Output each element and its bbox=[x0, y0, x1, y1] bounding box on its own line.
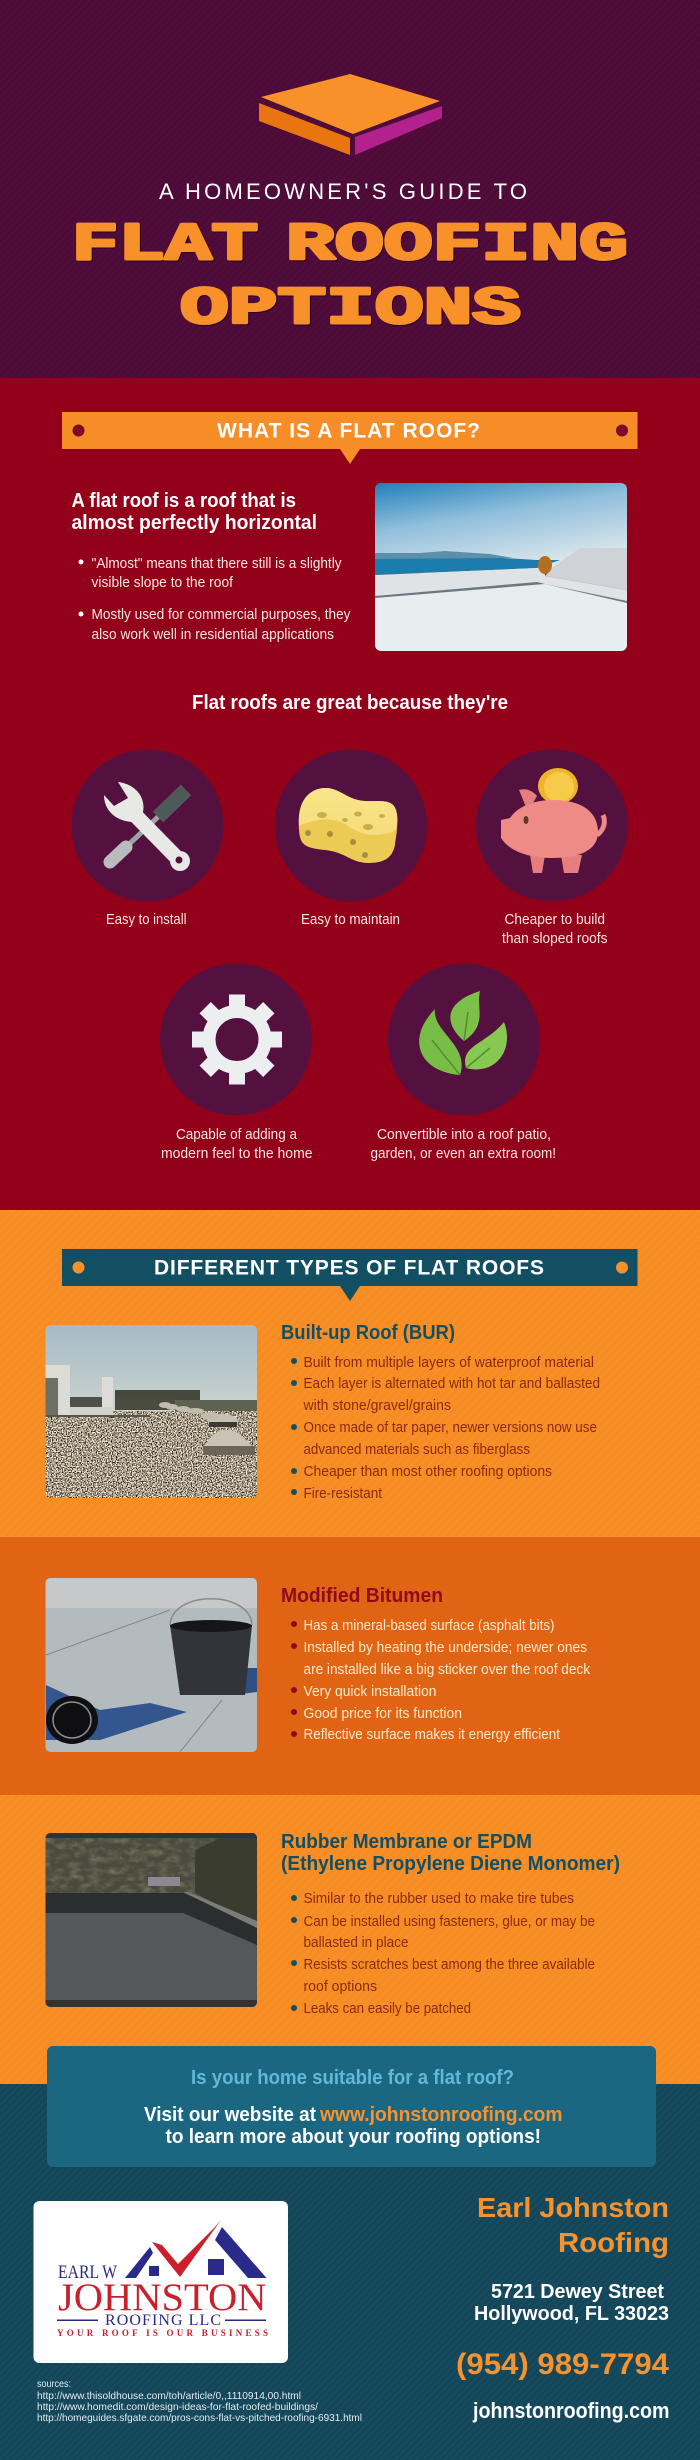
callout: visit website: to learn more about your roofing options! bbox=[166, 2126, 541, 2148]
icon: flat roof slab bbox=[259, 74, 442, 155]
logo: Earl W Johnston Roofing LLC: ROOFING LLC bbox=[105, 2312, 221, 2329]
list: modified bitumen facts: Reflective surface makes it energy efficient bbox=[304, 1727, 560, 1743]
definition text: A flat roof is a roof that is bbox=[72, 490, 296, 512]
benefit: cheaper to build: Cheaper to build bbox=[504, 912, 605, 928]
definition text: also work well in residential applications bbox=[92, 627, 334, 643]
heading: modified bitumen: Modified Bitumen bbox=[281, 1585, 443, 1607]
title: A HOMEOWNER'S GUIDE TO bbox=[159, 179, 527, 204]
title: ROOFING bbox=[286, 215, 628, 275]
list: built-up roof facts: Fire-resistant bbox=[304, 1486, 382, 1502]
logo: Earl W Johnston Roofing LLC: YOUR ROOF IS OUR BUSINESS bbox=[57, 2328, 268, 2338]
logo: Earl W Johnston Roofing LLC bbox=[34, 2201, 288, 2363]
contact details: Roofing bbox=[558, 2227, 669, 2258]
definition text: almost perfectly horizontal bbox=[72, 512, 317, 534]
banner: what is a flat roof bbox=[62, 412, 638, 464]
panel: rubber membrane bbox=[0, 1795, 700, 2084]
callout: visit website: www.johnstonroofing.com bbox=[319, 2104, 562, 2126]
list: rubber membrane facts: roof options bbox=[304, 1979, 377, 1995]
definition text: Mostly used for commercial purposes, they bbox=[92, 607, 351, 623]
list: modified bitumen facts: Has a mineral-based surface (asphalt bits) bbox=[304, 1618, 554, 1634]
list: built-up roof facts: with stone/gravel/grains bbox=[303, 1398, 451, 1414]
contact details: Earl Johnston bbox=[477, 2192, 669, 2223]
title bbox=[72, 179, 628, 339]
sources: http://www.thisoldhouse.com/toh/article/0,,1110914,00.html bbox=[37, 2390, 301, 2402]
callout: visit website: Visit our website at bbox=[144, 2104, 316, 2126]
title: OPTIONS bbox=[180, 279, 521, 339]
definition text: "Almost" means that there still is a slightly bbox=[92, 556, 342, 572]
contact details: 5721 Dewey Street bbox=[491, 2281, 664, 2303]
sources: http://homeguides.sfgate.com/pros-cons-flat-vs-pitched-roofing-6931.html bbox=[37, 2412, 362, 2424]
list: built-up roof facts: Built from multiple layers of waterproof material bbox=[304, 1355, 594, 1371]
panel: modified bitumen bbox=[0, 1537, 700, 1795]
photo: white flat roof over the sea bbox=[375, 483, 627, 651]
list: rubber membrane facts: Similar to the rubber used to make tire tubes bbox=[304, 1891, 574, 1907]
benefit: cheaper to build bbox=[476, 750, 628, 947]
benefit: easy to install: Easy to install bbox=[106, 912, 186, 928]
benefit: easy to install bbox=[72, 750, 224, 928]
photo: gravel built-up roof bbox=[45, 1325, 257, 1498]
definition text bbox=[72, 490, 351, 643]
photo: bitumen roll and bucket bbox=[45, 1578, 257, 1752]
callout: visit website: Is your home suitable for a flat roof? bbox=[191, 2067, 514, 2089]
banner: different types of flat roofs: DIFFERENT TYPES OF FLAT ROOFS bbox=[154, 1256, 544, 1280]
banner: what is a flat roof: WHAT IS A FLAT ROOF? bbox=[217, 420, 480, 442]
list: built-up roof facts: advanced materials such as fiberglass bbox=[304, 1442, 530, 1458]
list: modified bitumen facts bbox=[291, 1618, 591, 1743]
contact details: (954) 989-7794 bbox=[456, 2348, 669, 2381]
sources: http://www.homedit.com/design-ideas-for-flat-roofed-buildings/ bbox=[37, 2401, 318, 2413]
benefit: modern feel bbox=[160, 964, 312, 1162]
list: rubber membrane facts bbox=[291, 1891, 595, 2017]
logo: Earl W Johnston Roofing LLC: EARL W bbox=[58, 2262, 117, 2283]
list: rubber membrane facts: ballasted in place bbox=[304, 1935, 408, 1951]
contact details: johnstonroofing.com bbox=[472, 2398, 670, 2423]
benefit: modern feel: modern feel to the home bbox=[161, 1146, 312, 1162]
heading: rubber membrane: Rubber Membrane or EPDM bbox=[281, 1831, 532, 1853]
list: modified bitumen facts: are installed like a big sticker over the roof deck bbox=[304, 1662, 591, 1678]
benefit: convertible roof: garden, or even an extra room! bbox=[370, 1146, 556, 1162]
panel: built-up roof bbox=[0, 1210, 700, 1537]
callout: visit website bbox=[47, 2046, 656, 2167]
title: FLAT bbox=[72, 215, 258, 275]
list: built-up roof facts: Cheaper than most other roofing options bbox=[304, 1464, 552, 1480]
list: rubber membrane facts: Leaks can easily be patched bbox=[304, 2001, 471, 2017]
subheading: flat roofs are great: Flat roofs are great because they're bbox=[192, 692, 508, 714]
list: built-up roof facts bbox=[291, 1355, 600, 1502]
list: rubber membrane facts: Can be installed using fasteners, glue, or may be bbox=[304, 1914, 595, 1930]
benefit: easy to maintain: Easy to maintain bbox=[301, 912, 400, 928]
panel: header bbox=[0, 0, 700, 378]
sources: sources: bbox=[37, 2378, 71, 2390]
benefit: convertible roof bbox=[370, 964, 556, 1162]
heading: rubber membrane bbox=[281, 1831, 620, 1875]
banner: different types of flat roofs bbox=[62, 1249, 638, 1301]
list: modified bitumen facts: Installed by heating the underside; newer ones bbox=[304, 1640, 587, 1656]
list: built-up roof facts: Once made of tar paper, newer versions now use bbox=[304, 1420, 597, 1436]
photo: EPDM rubber roof bbox=[45, 1833, 257, 2007]
list: modified bitumen facts: Very quick installation bbox=[304, 1684, 436, 1700]
sources bbox=[37, 2378, 362, 2424]
heading: rubber membrane: (Ethylene Propylene Diene Monomer) bbox=[281, 1853, 620, 1875]
heading: built-up roof: Built-up Roof (BUR) bbox=[281, 1322, 455, 1344]
panel: footer bbox=[0, 2046, 700, 2460]
list: modified bitumen facts: Good price for its function bbox=[304, 1706, 462, 1722]
list: built-up roof facts: Each layer is alternated with hot tar and ballasted bbox=[304, 1376, 600, 1392]
benefit: modern feel: Capable of adding a bbox=[176, 1127, 298, 1143]
logo: Earl W Johnston Roofing LLC: JOHNSTON bbox=[58, 2276, 266, 2319]
benefit: convertible roof: Convertible into a roof patio, bbox=[377, 1127, 551, 1143]
definition text: visible slope to the roof bbox=[92, 575, 234, 591]
benefit: cheaper to build: than sloped roofs bbox=[502, 931, 608, 947]
panel: what is a flat roof bbox=[0, 378, 700, 1210]
contact details bbox=[456, 2192, 670, 2423]
benefit: easy to maintain bbox=[275, 750, 427, 928]
list: rubber membrane facts: Resists scratches best among the three available bbox=[304, 1957, 595, 1973]
contact details: Hollywood, FL 33023 bbox=[474, 2303, 669, 2325]
